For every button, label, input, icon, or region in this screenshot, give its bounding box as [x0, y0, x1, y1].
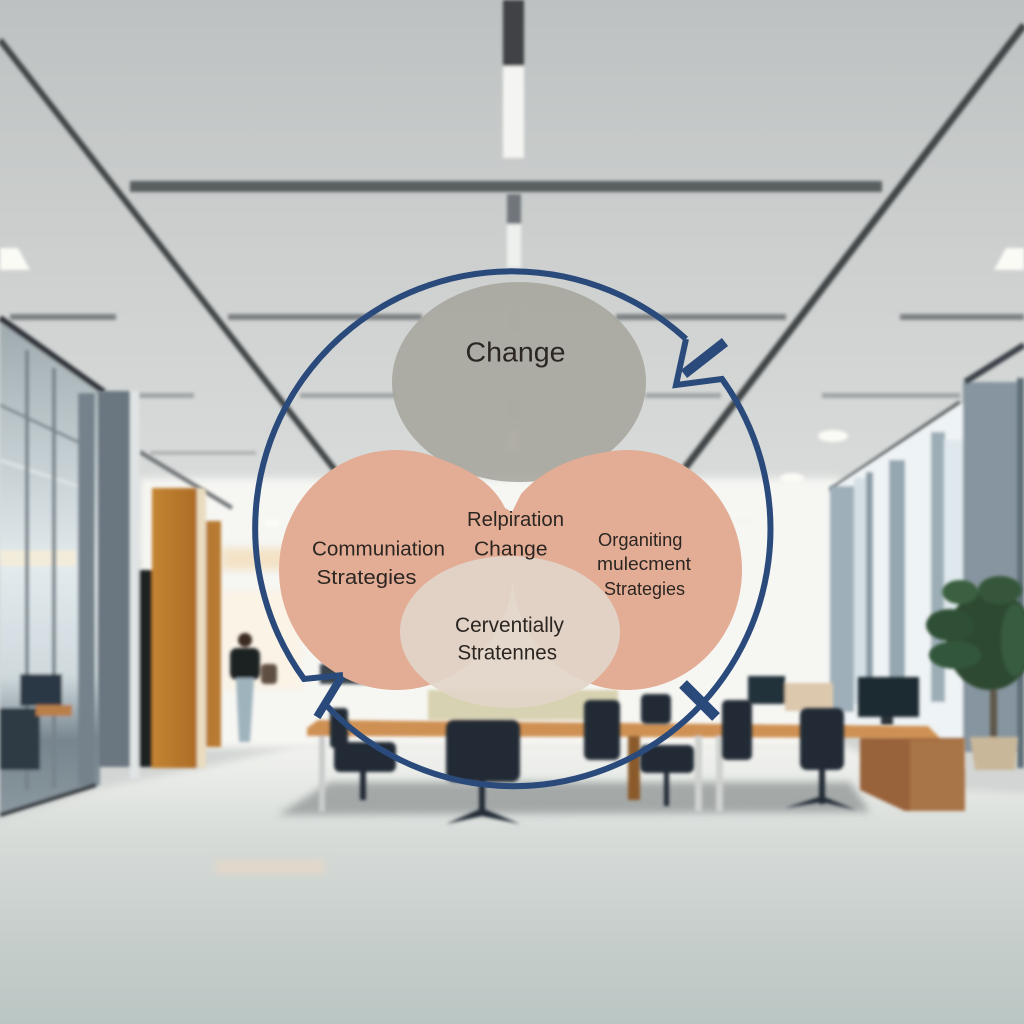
ceiling: [0, 0, 1024, 560]
right windows: [830, 345, 1024, 770]
cycle ring with arrows: [255, 271, 770, 786]
ring: upper-left arc with bottom-left arrow head: [255, 271, 686, 679]
conference table: [307, 720, 965, 812]
arrow shaft: bottom right: [683, 684, 716, 717]
person: [230, 633, 277, 742]
pink overlap between circles: [440, 453, 600, 570]
label: change: Change: [466, 336, 566, 368]
left glass wall: [0, 318, 104, 815]
arrow shaft: top right: [684, 342, 725, 374]
office chairs: [330, 694, 856, 824]
circle: communication strategies: [279, 450, 513, 690]
monitors and laptops: [320, 664, 919, 725]
label: organizing line 3: Strategies: [604, 579, 685, 599]
circle: organizing strategies: [512, 450, 742, 690]
ceiling lights: [0, 0, 1024, 527]
circle: change: [392, 282, 646, 482]
back wall: [140, 478, 840, 748]
ceiling beams: [0, 25, 1024, 508]
ring: lower-right arc with top-right arrow head: [326, 339, 770, 786]
arrow shaft: bottom left: [317, 676, 342, 717]
label: central change: Relpiration: [467, 509, 564, 531]
label: organizing: Organiting: [598, 530, 682, 550]
venn diagram: [279, 282, 742, 708]
label: communication strategies line 2: Strategies: [316, 567, 416, 589]
columns and door: [98, 391, 221, 779]
circle: centre overlap: [400, 556, 620, 708]
label: central change line 2: Change: [474, 538, 548, 560]
potted plant: [926, 576, 1024, 770]
floor: [0, 745, 1024, 1024]
dark floor rug: [278, 782, 870, 815]
label: centrally line 2: Stratennes: [458, 642, 557, 664]
label: centrally: Cerventially: [455, 614, 564, 637]
label: communication strategies: Communiation: [312, 538, 445, 560]
label: organizing line 2: mulecment: [597, 554, 691, 574]
